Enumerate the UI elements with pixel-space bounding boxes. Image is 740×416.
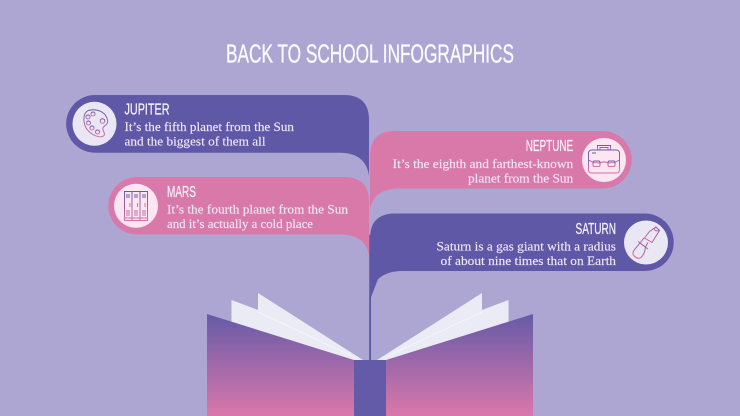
saturn icon [624, 220, 668, 264]
neptune banner shape [370, 131, 632, 210]
saturn text [436, 240, 617, 268]
mars text: and it’s actually a cold place [167, 217, 313, 231]
branch: mars [108, 177, 369, 256]
title: BACK TO SCHOOL INFOGRAPHICS [226, 40, 514, 68]
neptune text: It’s the eighth and farthest-known [393, 157, 574, 171]
saturn text: of about nine times that on Earth [440, 254, 617, 268]
jupiter text: It’s the fifth planet from the Sun [124, 120, 295, 134]
branch: saturn with stem [369, 214, 674, 360]
mars text: It’s the fourth planet from the Sun [167, 202, 349, 216]
jupiter text: and the biggest of them all [124, 135, 266, 149]
saturn text: Saturn is a gas giant with a radius [436, 240, 616, 254]
neptune icon [582, 138, 626, 182]
branch: jupiter [66, 95, 369, 176]
saturn banner shape and stem [370, 214, 674, 296]
neptune text [393, 157, 574, 186]
mars heading: MARS [167, 184, 196, 201]
jupiter banner shape [66, 95, 369, 176]
neptune text: planet from the Sun [468, 172, 574, 186]
book spine [354, 360, 386, 416]
neptune heading: NEPTUNE [526, 138, 573, 155]
mars icon [114, 184, 158, 228]
jupiter heading: JUPITER [124, 102, 170, 118]
mars text [167, 202, 349, 231]
book illustration [207, 293, 533, 416]
saturn heading: SATURN [576, 221, 616, 238]
book pages [232, 293, 508, 361]
branch: neptune [370, 131, 632, 210]
mars banner shape [108, 177, 369, 256]
jupiter text [124, 120, 295, 149]
jupiter icon [72, 102, 116, 146]
book covers [207, 314, 533, 416]
